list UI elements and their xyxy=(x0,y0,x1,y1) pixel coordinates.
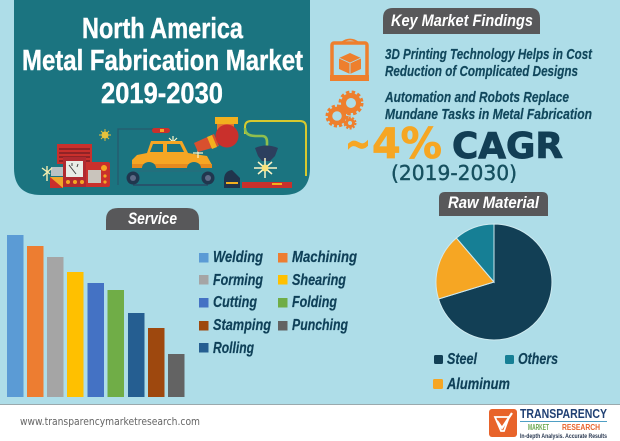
tab: key market findings: Key Market Findings xyxy=(391,11,533,30)
legend: service: Rolling xyxy=(213,340,254,357)
bar chart: service xyxy=(7,235,184,397)
CAGR callout: (2019-2030) xyxy=(391,161,517,185)
website URL: www.transparencymarketresearch.com xyxy=(20,415,200,428)
title: 2019-2030 xyxy=(101,78,223,110)
tab: raw material: Raw Material xyxy=(448,193,540,212)
legend: raw material: Steel xyxy=(447,351,477,368)
logo: Transparency Market Research: RESEARCH xyxy=(562,423,600,432)
CAGR callout: ~ xyxy=(345,119,371,168)
tab: service: Service xyxy=(128,209,177,228)
legend: service: Shearing xyxy=(292,272,346,289)
tab: key market findings xyxy=(383,8,540,34)
tab: service xyxy=(106,208,199,230)
legend: service: Welding xyxy=(213,249,263,266)
logo: Transparency Market Research: MARKET xyxy=(528,423,549,432)
illustration: welding machines xyxy=(42,144,110,188)
finding: automation: Automation and Robots Replace xyxy=(384,89,569,106)
icon: logo badge xyxy=(489,409,517,437)
illustration: helmet and work bed xyxy=(224,170,292,188)
legend: raw material: Others xyxy=(518,351,558,368)
legend: raw material: Aluminum xyxy=(446,376,510,393)
panel: title and illustration xyxy=(14,0,310,195)
icon: 3D printer xyxy=(330,40,369,81)
legend: service: Folding xyxy=(292,294,337,311)
title xyxy=(22,13,303,110)
illustration: welding torch and wire xyxy=(118,128,179,185)
legend: service: Stamping xyxy=(213,317,271,334)
legend: service: Cutting xyxy=(213,294,257,311)
CAGR callout: 4% xyxy=(372,119,442,168)
icon: spark xyxy=(99,129,111,141)
illustration: robot arm xyxy=(194,117,238,152)
logo: Transparency Market Research xyxy=(489,406,607,440)
illustration: car on conveyor xyxy=(126,141,214,185)
legend: raw material xyxy=(433,351,558,393)
icon: gears xyxy=(327,92,362,128)
finding: automation xyxy=(384,89,592,123)
legend: service: Forming xyxy=(213,272,263,289)
pie chart: raw material xyxy=(436,224,552,340)
finding: 3D printing xyxy=(385,46,593,80)
CAGR callout xyxy=(345,119,563,185)
illustration: pipe and welding head xyxy=(245,121,306,178)
title: North America xyxy=(82,13,244,45)
title: Metal Fabrication Market xyxy=(22,45,303,77)
CAGR callout: CAGR xyxy=(452,126,563,167)
footer xyxy=(0,404,620,441)
legend: service xyxy=(199,249,357,357)
legend: service: Machining xyxy=(292,249,357,266)
legend: service: Punching xyxy=(292,317,348,334)
